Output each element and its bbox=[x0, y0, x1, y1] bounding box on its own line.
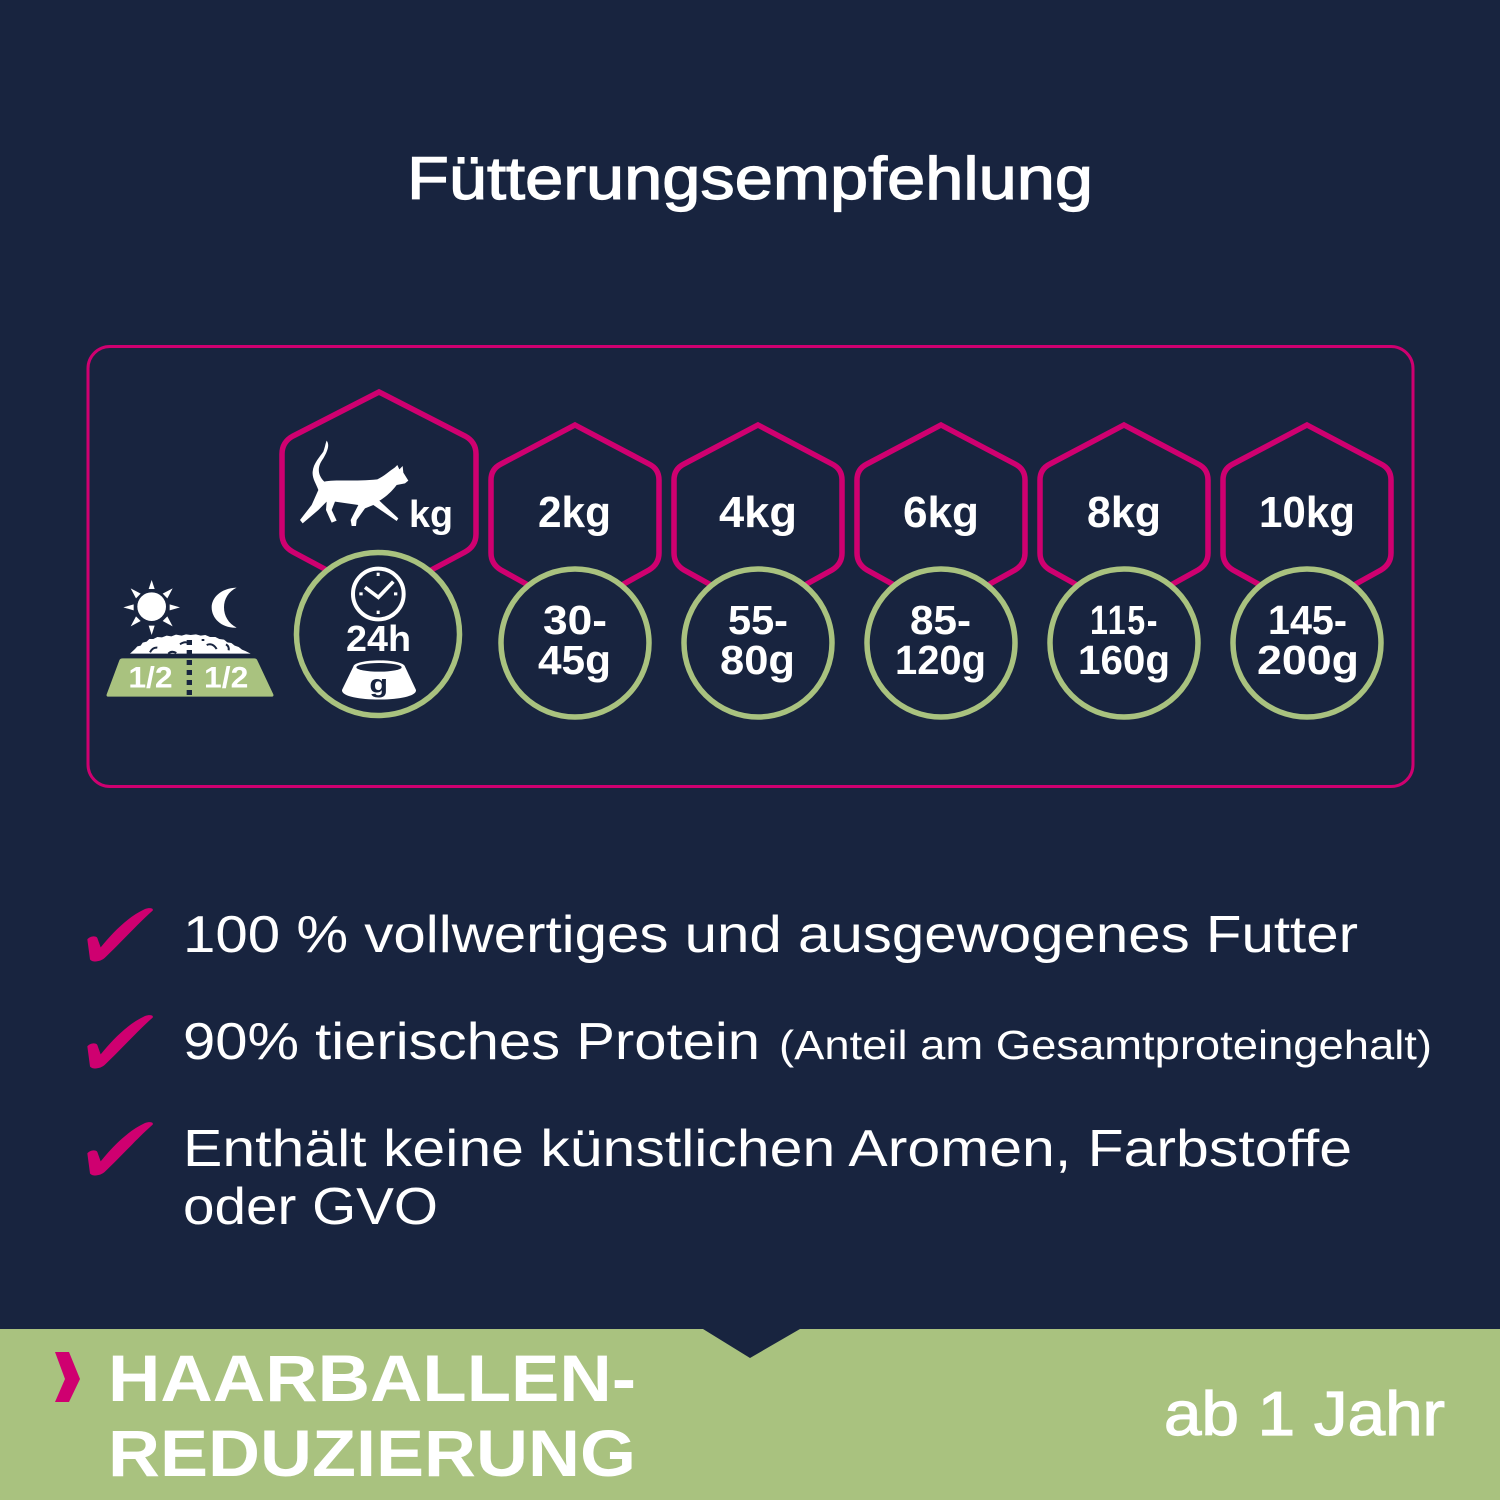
label: kg: kg bbox=[409, 494, 453, 536]
column: 8kg: 115- bbox=[1090, 597, 1159, 643]
column: 2kg: 45g bbox=[538, 637, 611, 683]
column: 4kg: 80g bbox=[720, 637, 795, 683]
column: 8kg bbox=[1040, 425, 1208, 717]
column: 10kg: 200g bbox=[1257, 637, 1359, 683]
column: 6kg: 120g bbox=[895, 637, 986, 683]
column: 8kg: 8kg bbox=[1087, 488, 1161, 537]
benefit 3: Enthält keine künstlichen Aromen, Farbstoffe bbox=[183, 1120, 1352, 1178]
footer band bbox=[0, 1329, 1500, 1500]
icon: day and night portions bowl: 1/2 bbox=[128, 661, 173, 694]
benefit 3 bbox=[87, 1120, 1352, 1236]
column: 2kg: 2kg bbox=[538, 488, 611, 537]
icon: food bowl with g bbox=[342, 660, 416, 699]
benefit 2: (Anteil am Gesamtproteingehalt) bbox=[779, 1022, 1432, 1068]
heading: product benefit: REDUZIERUNG bbox=[108, 1416, 636, 1490]
icon: clock bbox=[353, 569, 404, 619]
age label: ab 1 Jahr bbox=[1164, 1380, 1445, 1449]
icon: day and night portions bowl: 1/2 bbox=[204, 661, 248, 694]
benefit 2 bbox=[87, 1013, 1432, 1071]
heading: product benefit bbox=[108, 1341, 636, 1490]
column: 4kg: 55- bbox=[728, 597, 788, 643]
title: Fütterungsempfehlung bbox=[407, 145, 1093, 212]
icon: food bowl with g: g bbox=[369, 671, 388, 699]
column: 10kg: 145- bbox=[1268, 597, 1347, 643]
icon: walking cat bbox=[300, 441, 408, 526]
benefit 2: 90% tierisches Protein bbox=[183, 1013, 760, 1071]
column: 2kg: 30- bbox=[543, 597, 607, 643]
column: 10kg bbox=[1223, 425, 1391, 717]
column: 6kg bbox=[857, 425, 1025, 717]
column: 2kg bbox=[491, 425, 659, 717]
icon: day and night portions bowl bbox=[107, 580, 273, 697]
benefit 3: oder GVO bbox=[183, 1178, 438, 1236]
hexagon: cat weight header bbox=[282, 392, 476, 598]
column: 6kg: 85- bbox=[910, 597, 971, 643]
column: 10kg: 10kg bbox=[1259, 488, 1355, 537]
label: 24h: 24h bbox=[346, 618, 411, 659]
icon: chevron bbox=[55, 1352, 80, 1402]
heading: product benefit: HAARBALLEN- bbox=[108, 1341, 636, 1415]
icon: check mark bbox=[87, 1122, 153, 1175]
icon: check mark bbox=[87, 908, 153, 961]
column: 8kg: 160g bbox=[1078, 637, 1170, 683]
circle: 24h grams per day header bbox=[296, 552, 460, 716]
icon: check mark bbox=[87, 1015, 153, 1068]
column: 4kg bbox=[674, 425, 842, 717]
benefit 1: 100 % vollwertiges und ausgewogenes Futter bbox=[183, 906, 1358, 964]
column: 4kg: 4kg bbox=[719, 488, 797, 537]
column: 6kg: 6kg bbox=[903, 488, 979, 537]
panel: feeding table bbox=[88, 346, 1413, 786]
